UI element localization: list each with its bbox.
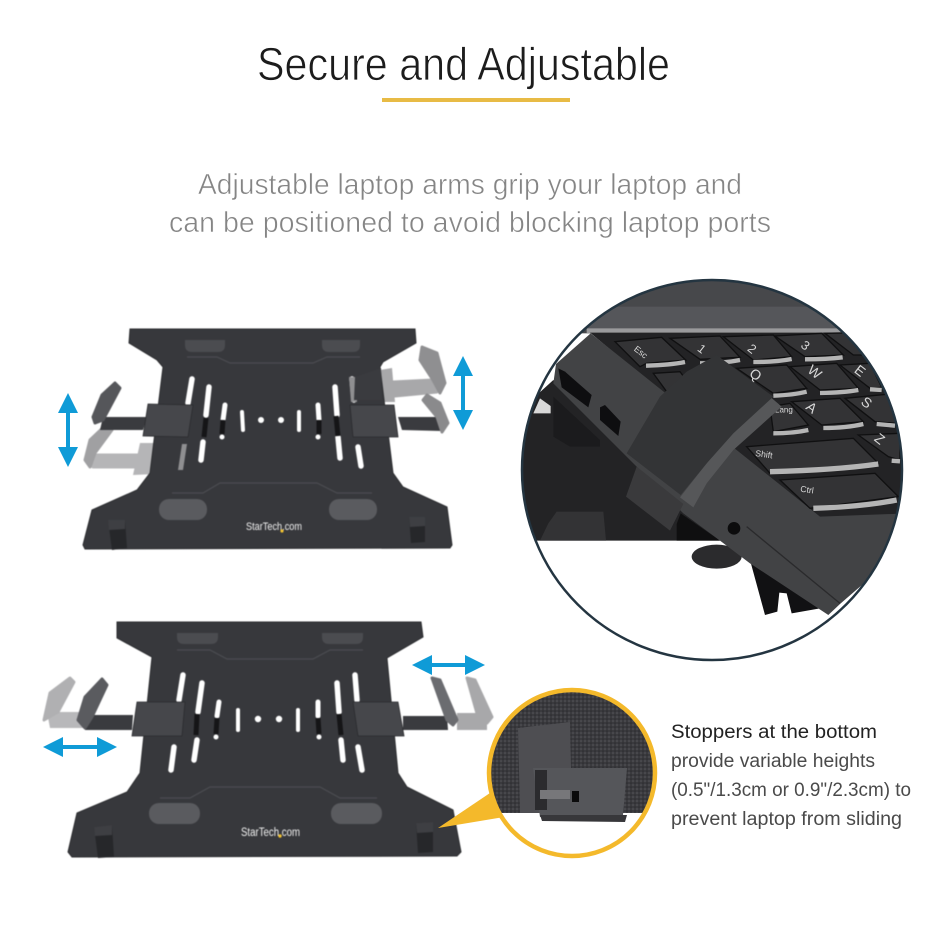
- plate body: [83, 329, 452, 549]
- slot shadows: [196, 714, 341, 735]
- key labels: Shift: [755, 448, 774, 460]
- logo dot: [280, 529, 284, 533]
- stoppers description: [671, 722, 911, 830]
- logo: StarTech.com: [241, 827, 300, 839]
- subtitle: [169, 169, 771, 239]
- circle outline: [522, 280, 902, 660]
- keyboard deck: [590, 333, 910, 523]
- key labels: S: [858, 393, 875, 411]
- yellow ring: [489, 690, 655, 856]
- key labels: Q: [746, 365, 765, 384]
- ghost arm left: [44, 678, 83, 728]
- rubber clip: [627, 355, 773, 495]
- mounting slots: [171, 675, 362, 770]
- arms: [78, 678, 457, 730]
- stoppers description: prevent laptop from sliding: [671, 809, 902, 830]
- rubber pads: [149, 633, 382, 824]
- key labels: 2: [745, 341, 759, 357]
- mounting slots: [188, 379, 361, 466]
- left dark stand: [517, 380, 720, 541]
- title underline: [382, 98, 570, 102]
- key labels: W: [805, 361, 826, 383]
- panel: vertical adjustment plate: [83, 329, 452, 550]
- plate body: [68, 622, 461, 857]
- bracket: [626, 467, 683, 531]
- front seam: [747, 527, 840, 603]
- arrow: horizontal right: [412, 655, 485, 675]
- close-up photo: [491, 692, 653, 822]
- lower bracket: [750, 560, 820, 615]
- key labels: 1: [695, 341, 709, 357]
- key labels: Ctrl: [800, 484, 815, 496]
- stoppers: [108, 517, 425, 550]
- subtitle: Adjustable laptop arms grip your laptop and: [198, 169, 742, 201]
- key highlights: [646, 357, 900, 508]
- stoppers description: (0.5"/1.3cm or 0.9"/2.3cm) to: [671, 780, 911, 801]
- title: Secure and Adjustable: [257, 38, 670, 90]
- stoppers description: provide variable heights: [671, 751, 875, 772]
- under-clip gap: [677, 513, 720, 541]
- key labels: A: [803, 398, 821, 417]
- key labels: Z: [871, 430, 888, 448]
- laptop lid band: [582, 281, 837, 334]
- audio jack: [728, 522, 740, 535]
- rubber pads: [159, 340, 377, 520]
- key labels: Esc: [632, 344, 650, 361]
- stand panel: [556, 438, 568, 446]
- key labels: Lang: [775, 406, 793, 415]
- key labels: E: [851, 361, 869, 380]
- embossed lines: [160, 650, 377, 798]
- white gap: [533, 398, 551, 413]
- embossed lines: [172, 357, 372, 493]
- dark pad: [540, 512, 606, 541]
- keys: [615, 333, 900, 508]
- knob: [692, 545, 742, 569]
- panel: stopper close-up: [485, 685, 660, 856]
- arms: [93, 383, 448, 432]
- panel: circular laptop close-up: [517, 277, 910, 615]
- mini display port: [600, 405, 621, 436]
- stoppers: [94, 822, 433, 858]
- laptop side and front: [553, 333, 910, 615]
- subtitle: can be positioned to avoid blocking laptop ports: [169, 207, 771, 239]
- arrow: vertical right: [453, 356, 473, 430]
- clamp blocks: [132, 702, 404, 736]
- key labels: [632, 338, 888, 496]
- rubber clip rim: [680, 397, 782, 507]
- ghost arm right: [380, 347, 445, 402]
- ghost arm right: [457, 678, 492, 730]
- ghost arm left: [85, 423, 160, 475]
- arrow: vertical left: [58, 393, 78, 467]
- callout pointer: [438, 793, 504, 828]
- stoppers description: Stoppers at the bottom: [671, 722, 877, 743]
- arrow: horizontal left: [43, 737, 117, 757]
- key labels: 3: [798, 338, 812, 353]
- panel: horizontal adjustment plate: [44, 622, 492, 858]
- logo: StarTech.com: [246, 521, 302, 533]
- HDMI port: [558, 368, 592, 407]
- logo dot: [278, 834, 282, 838]
- clamp blocks: [143, 368, 398, 437]
- slot shadows: [204, 416, 338, 437]
- ghost clamp strips: [178, 377, 357, 470]
